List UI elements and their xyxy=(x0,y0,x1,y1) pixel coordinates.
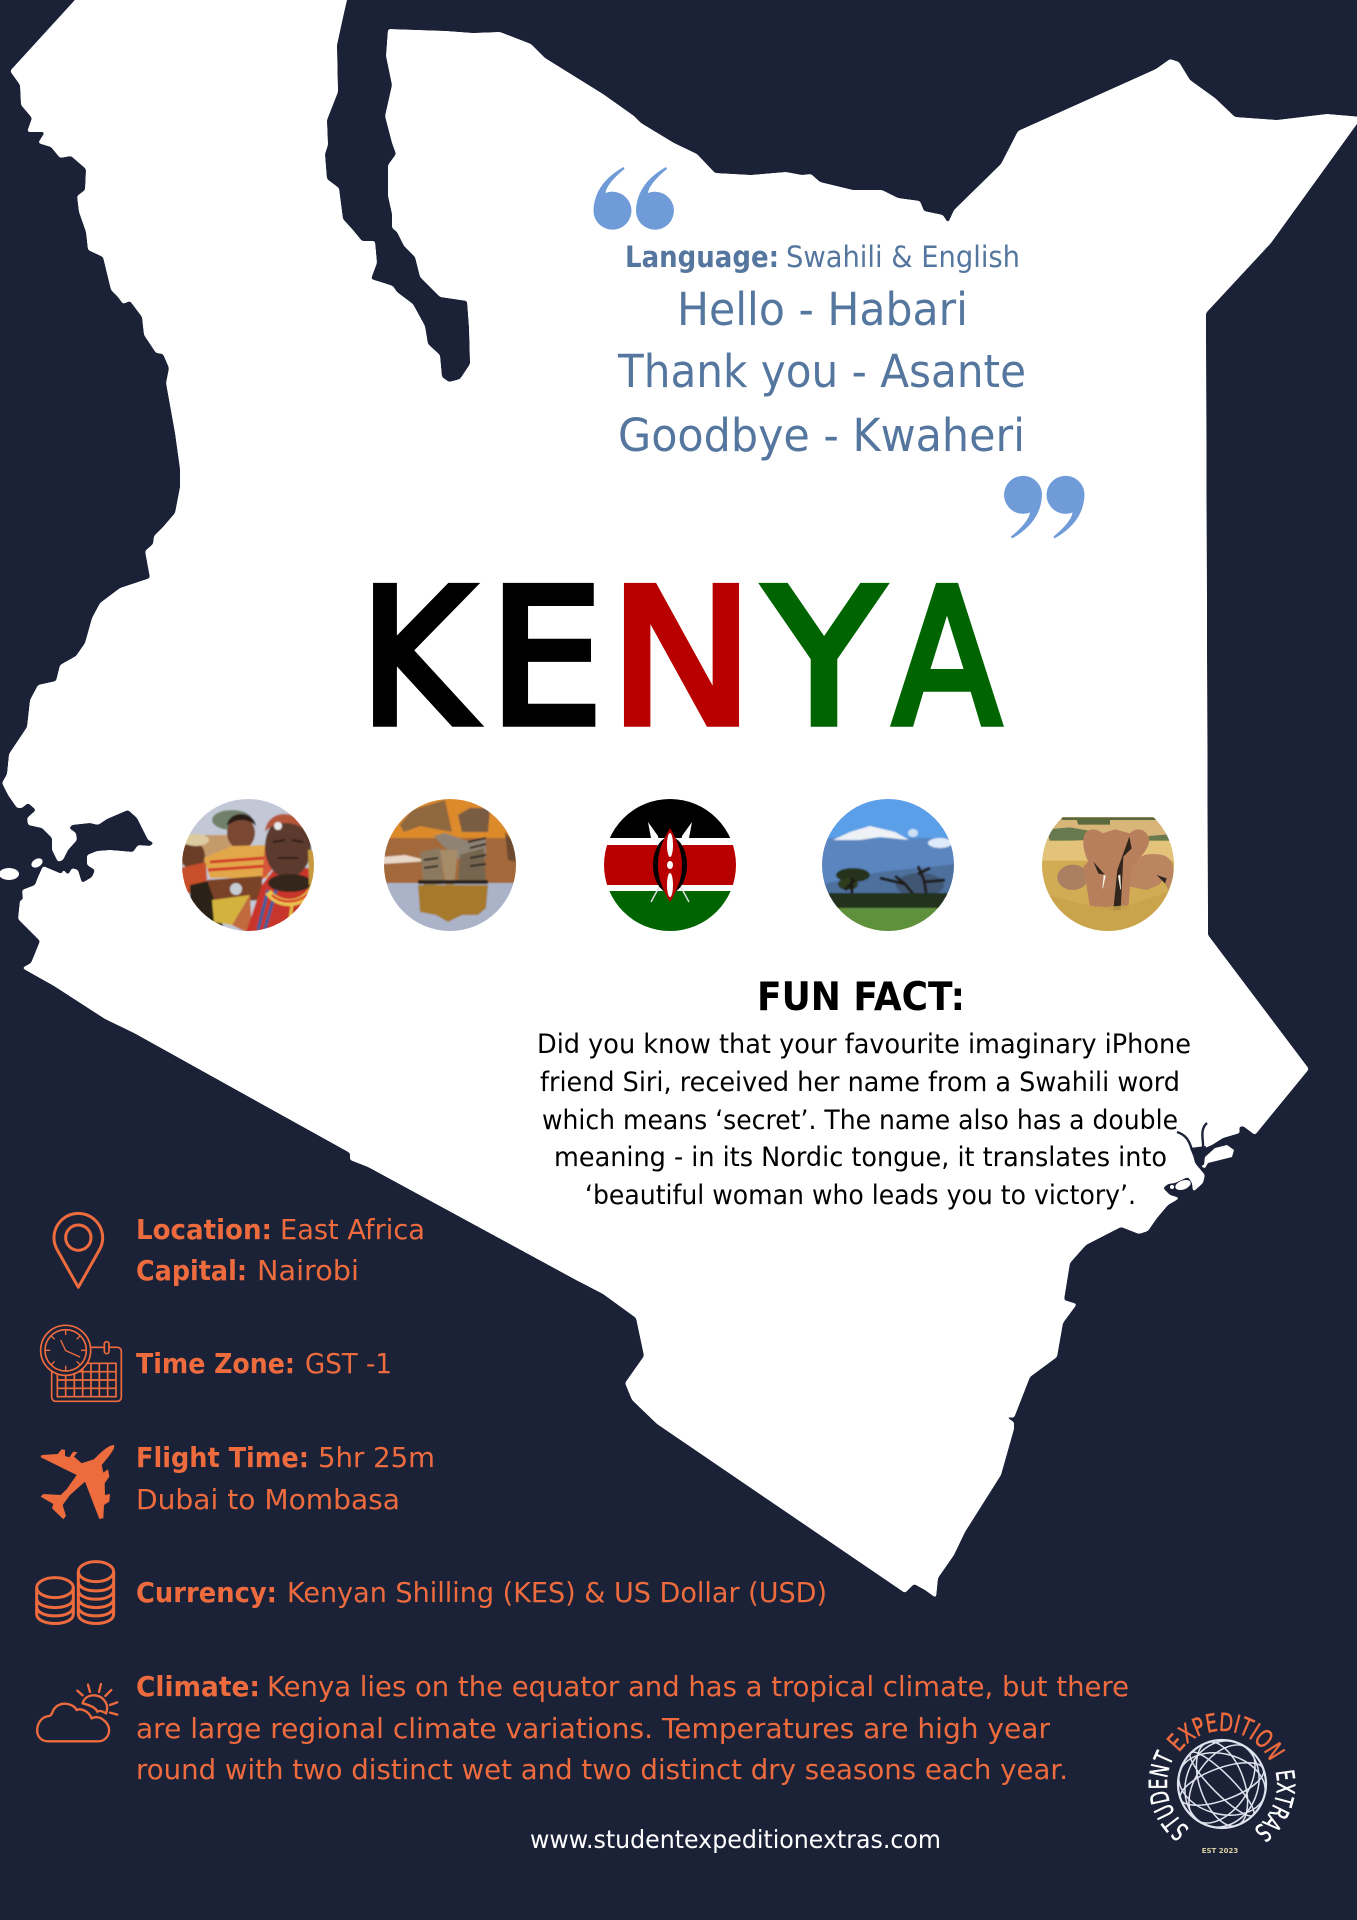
logo text: EXTRAS: EXTRAS xyxy=(1256,1770,1296,1842)
title: KENYA: N xyxy=(609,550,754,767)
text: time zone: Time Zone: xyxy=(136,1347,295,1380)
logo text: EXPEDITION: EXPEDITION xyxy=(1166,1712,1286,1760)
phrase: goodbye: Goodbye - Kwaheri xyxy=(618,409,1025,462)
text: flight time: Dubai to Mombasa xyxy=(136,1483,400,1516)
icon: coin stacks xyxy=(37,1562,114,1623)
logo globe xyxy=(1172,1730,1272,1838)
icon: location pin xyxy=(54,1213,103,1287)
text: location and capital: Capital: xyxy=(136,1254,247,1287)
text: climate: Climate: xyxy=(136,1670,260,1703)
photo: Samburu women xyxy=(180,797,316,935)
title: KENYA: A xyxy=(893,550,1001,767)
logo text: EST 2023: EST 2023 xyxy=(1202,1847,1238,1855)
fun fact body: Did you know that your favourite imaginary iPhone xyxy=(537,1029,1191,1060)
text: time zone: GST -1 xyxy=(305,1347,392,1380)
fun fact body: which means ‘secret’. The name also has a double xyxy=(542,1105,1178,1136)
text: climate xyxy=(136,1670,1129,1786)
fun fact block xyxy=(537,975,1191,1211)
text: currency: Kenyan Shilling (KES) & US Dollar (USD) xyxy=(287,1576,827,1609)
icon: opening quote mark xyxy=(594,167,674,230)
phrase: thank you: Thank you - Asante xyxy=(617,345,1026,398)
text: flight time xyxy=(136,1441,435,1516)
title: KENYA xyxy=(360,550,1001,768)
fun fact body: ‘beautiful woman who leads you to victory’. xyxy=(585,1180,1136,1211)
icon: clock and calendar xyxy=(41,1325,121,1401)
title: KENYA: Y xyxy=(765,550,883,768)
fun fact heading: FUN FACT: xyxy=(757,975,965,1020)
title: KENYA: K xyxy=(360,550,476,768)
text: location and capital xyxy=(136,1213,425,1287)
text: flight time: Flight Time: xyxy=(136,1441,309,1474)
text: climate: Kenya lies on the equator and has a tropical climate, but there xyxy=(267,1670,1129,1703)
language block xyxy=(617,240,1026,462)
fun fact body xyxy=(537,1029,1191,1211)
photo: elephants xyxy=(1040,817,1177,933)
text: currency: Currency: xyxy=(136,1576,277,1609)
text: time zone xyxy=(136,1347,392,1380)
fun fact body: friend Siri, received her name from a Swahili word xyxy=(540,1067,1180,1098)
fun fact body: meaning - in its Nordic tongue, it translates into xyxy=(554,1142,1167,1173)
text: climate: are large regional climate variations. Temperatures are high year xyxy=(136,1712,1050,1745)
phrase: hello: Hello - Habari xyxy=(677,283,968,336)
language label: Language: xyxy=(625,240,779,274)
title: KENYA: E xyxy=(489,550,603,768)
text: climate: round with two distinct wet and two distinct dry seasons each year. xyxy=(136,1753,1068,1786)
text: flight time: 5hr 25m xyxy=(318,1441,435,1474)
photo: Mount Kenya landscape xyxy=(820,797,956,933)
icon: closing quote mark xyxy=(1004,476,1084,538)
language value: Swahili & English xyxy=(786,240,1020,274)
text: location and capital: East Africa xyxy=(280,1213,425,1246)
photo: zebras at waterhole xyxy=(382,797,518,933)
text: location and capital: Nairobi xyxy=(257,1254,359,1287)
logo: Student Expedition Extras xyxy=(1148,1712,1296,1855)
photo: Kenyan flag xyxy=(604,799,736,931)
text: location and capital: Location: xyxy=(136,1213,272,1246)
logo text: STUDENT: STUDENT xyxy=(1148,1749,1188,1840)
icon: airplane xyxy=(41,1445,114,1519)
website: www.studentexpeditionextras.com xyxy=(530,1825,941,1854)
icon: cloud and sun xyxy=(37,1684,117,1741)
